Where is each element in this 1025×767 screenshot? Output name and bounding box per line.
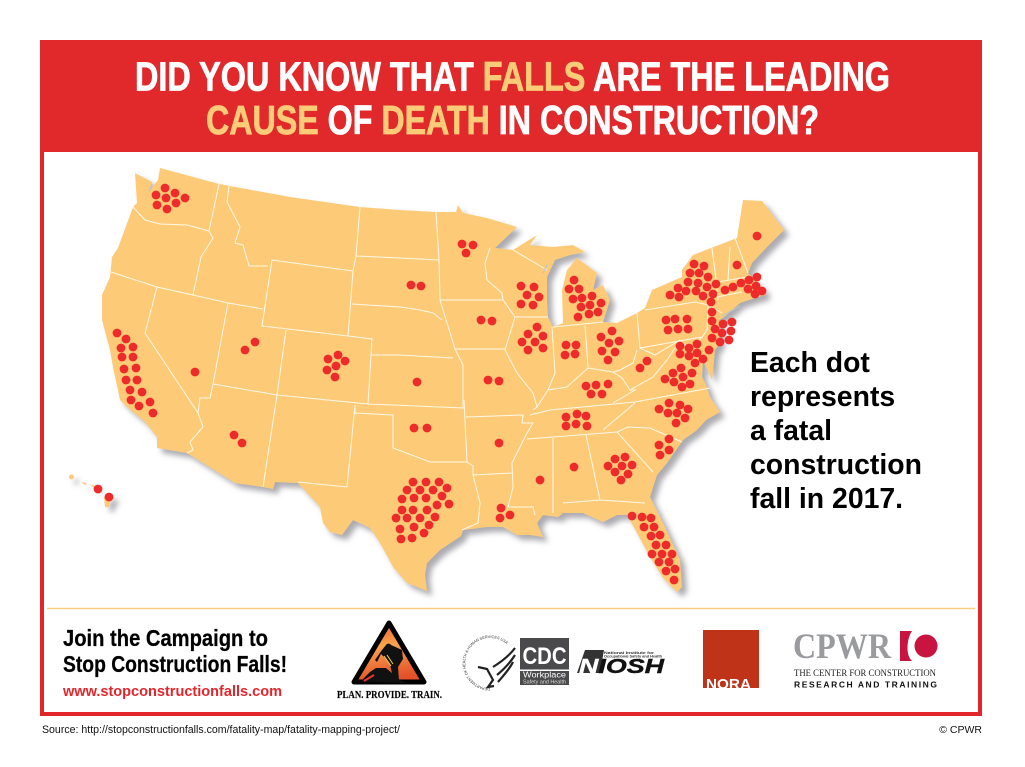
- logo: Plan Provide Train: [337, 623, 442, 701]
- fatal fall dots: [94, 184, 766, 584]
- logo: CPWR: RESEARCH AND TRAINING: [794, 680, 937, 690]
- campaign call to action: Stop Construction Falls!: [63, 651, 287, 677]
- footer divider: [47, 608, 975, 610]
- dots: Texas: [392, 478, 453, 543]
- dots: Pennsylvania: [662, 315, 692, 334]
- legend text: each dot: [750, 347, 922, 515]
- dots: Hawaii: [94, 485, 113, 501]
- dots: Maryland and Delaware: [676, 340, 713, 367]
- logo: NIOSH: Occupational Safety and Health: [604, 654, 662, 658]
- legend text: each dot: fall in 2017.: [750, 483, 903, 515]
- icon: construction worker: [360, 644, 406, 683]
- dots: Washington: [152, 184, 189, 213]
- dots: Indiana: [561, 341, 580, 359]
- dots: Michigan: [565, 276, 605, 321]
- title: CAUSE OF DEATH IN CONSTRUCTION?: [206, 97, 819, 143]
- legend text: each dot: a fatal: [750, 415, 832, 447]
- legend text: each dot: Each dot: [750, 347, 870, 379]
- map: land: [69, 168, 784, 592]
- copyright: © CPWR: [939, 724, 982, 736]
- dots: New Jersey: [708, 318, 736, 346]
- map: coastal water details: [121, 184, 740, 375]
- dots: Ohio: [597, 327, 623, 364]
- logo: NIOSH: NIOSH: [579, 655, 666, 678]
- header banner: [40, 40, 982, 152]
- dots: Iowa, Kansas, Missouri, Oklahoma: [410, 316, 503, 432]
- dots: Virginia: [661, 364, 696, 391]
- campaign call to action: [62, 625, 287, 700]
- dots: Illinois: [518, 323, 547, 354]
- dots: South Carolina: [655, 435, 673, 459]
- legend text: each dot: represents: [750, 381, 895, 413]
- source note: Source: http://stopconstructionfalls.com/fatality-map/fatality-mapping-project/: [42, 724, 401, 736]
- dots: Wisconsin: [517, 282, 543, 309]
- dots: Kentucky and West Virginia: [582, 357, 651, 398]
- campaign call to action: Join the Campaign to: [63, 625, 268, 651]
- dots: Colorado: [323, 351, 349, 381]
- campaign URL: www.stopconstructionfalls.com: [62, 683, 282, 700]
- logo: NORA: NORA: [706, 676, 751, 693]
- title: [135, 54, 890, 143]
- dots: Louisiana: [496, 504, 514, 522]
- logo: Plan Provide Train: PLAN. PROVIDE. TRAIN.: [337, 689, 442, 701]
- dots: New England: [721, 232, 766, 298]
- dots: Florida: [628, 512, 679, 584]
- dots: Tennessee: [562, 410, 591, 430]
- dots: Minnesota and South Dakota: [407, 240, 477, 290]
- dots: Arkansas, Mississippi, Alabama: [495, 439, 578, 484]
- logo: CDC: CDC: [522, 643, 566, 670]
- dots: Arizona: [230, 431, 246, 447]
- dots: California: [113, 329, 157, 417]
- logo: HHS seal: DEPARTMENT OF HEALTH & HUMAN SERVICES USA: [462, 635, 508, 691]
- logo: CDC: Safety and Health: [523, 680, 566, 686]
- title: DID YOU KNOW THAT FALLS ARE THE LEADING: [135, 54, 890, 100]
- logo: NIOSH: National Institute for: [604, 651, 655, 655]
- logo: CPWR: [793, 626, 938, 690]
- logo: NORA: [703, 630, 759, 693]
- legend text: each dot: construction: [750, 449, 922, 481]
- map of the United States: [69, 168, 784, 592]
- dots: Nevada and Utah: [191, 338, 259, 376]
- logo: CDC: Workplace: [523, 670, 567, 680]
- logo: NIOSH: [577, 650, 666, 678]
- dots: Georgia: [604, 453, 636, 484]
- logo: CPWR: CPWR: [793, 626, 892, 666]
- map: state borders: [111, 184, 748, 530]
- dots: New York: [666, 260, 720, 325]
- logo: CPWR: THE CENTER FOR CONSTRUCTION: [794, 668, 936, 678]
- map: Hawaii: [69, 474, 114, 507]
- logo: CDC: [520, 638, 569, 686]
- dots: North Carolina: [655, 399, 692, 427]
